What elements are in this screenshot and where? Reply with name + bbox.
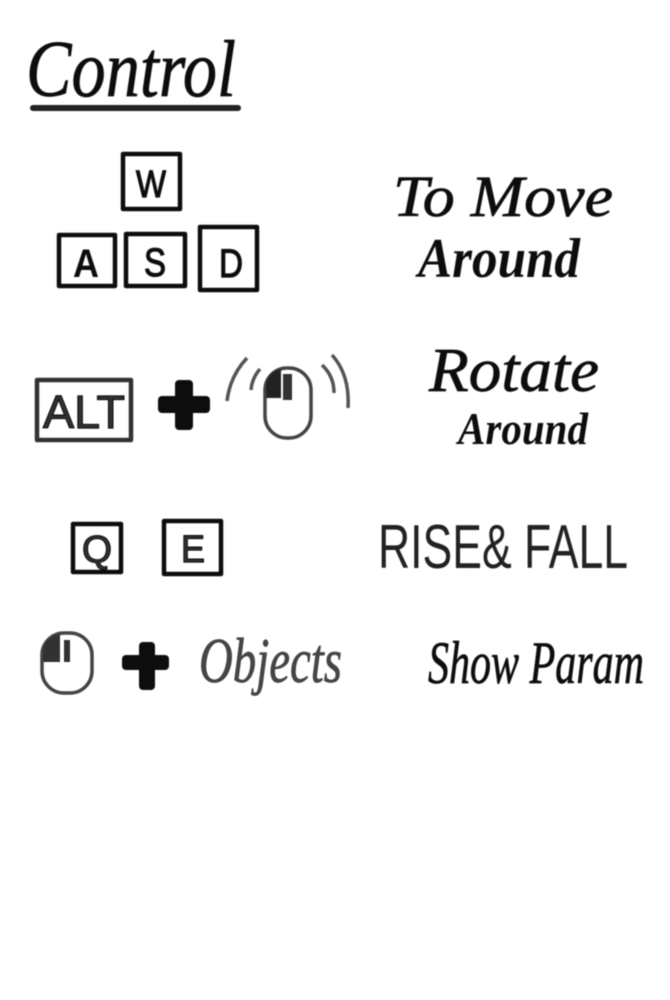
key group: WASD bbox=[59, 154, 257, 290]
infographic content bbox=[26, 26, 644, 696]
key: W: W bbox=[136, 164, 166, 206]
title: Control bbox=[26, 26, 236, 114]
icon: plus bbox=[158, 380, 210, 430]
key: W bbox=[123, 154, 180, 209]
key: S bbox=[126, 234, 185, 286]
key: A bbox=[59, 235, 115, 286]
label: to move around: Around bbox=[415, 228, 581, 290]
key: Q bbox=[73, 524, 121, 572]
key: Q: Q bbox=[82, 529, 112, 571]
key: D: D bbox=[219, 242, 243, 286]
icon: mouse scroll bbox=[227, 355, 348, 438]
label: rotate around bbox=[428, 337, 599, 454]
key: D bbox=[200, 227, 257, 290]
key: A: A bbox=[73, 242, 99, 286]
key: E bbox=[164, 521, 221, 574]
label: rotate around: Rotate bbox=[428, 337, 599, 405]
key: S: S bbox=[144, 241, 166, 285]
label: to move around bbox=[393, 164, 613, 290]
label: objects: Objects bbox=[199, 625, 342, 696]
key: ALT: ALT bbox=[43, 386, 125, 438]
key: E: E bbox=[181, 529, 205, 571]
icon: mouse left click bbox=[42, 633, 92, 693]
label: to move around: To Move bbox=[393, 164, 613, 229]
icon: plus bbox=[122, 642, 169, 690]
label: rotate around: Around bbox=[455, 403, 589, 454]
